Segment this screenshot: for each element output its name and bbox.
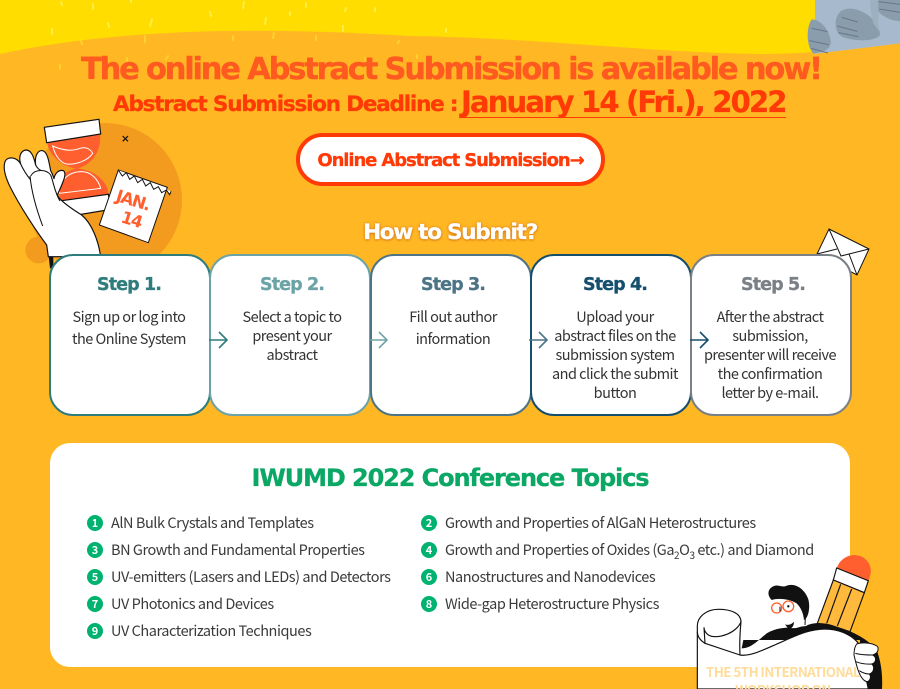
- step 4 text: button: [594, 382, 636, 403]
- step 4 text: Upload your: [576, 306, 654, 327]
- background: yellow header band: [0, 0, 815, 70]
- deadline date: January 14 (Fri.), 2022: [461, 85, 786, 119]
- step 4 text: submission system: [555, 344, 675, 365]
- panel: conference topics: 5: [92, 569, 98, 585]
- step 2 title: Step 2.: [260, 275, 324, 295]
- button: online abstract submission: [296, 133, 605, 186]
- illustration: hourglass, hand and calendar: 14: [119, 208, 145, 232]
- step 2 text: [242, 306, 342, 365]
- scroll text: THE 5TH INTERNATIONAL: [706, 661, 860, 681]
- step 1 title: Step 1.: [97, 275, 161, 295]
- topic 1: AlN Bulk Crystals and Templates: [111, 512, 314, 533]
- step 5 title: Step 5.: [741, 275, 805, 295]
- step 4 panel: [530, 254, 692, 416]
- panel: conference topics: [50, 443, 850, 667]
- step 5 text: [704, 306, 836, 403]
- illustration: hourglass, hand and calendar: JAN.: [113, 186, 152, 214]
- arrow: step 4 to 5: [690, 331, 709, 349]
- arrow: step 1 to 2: [209, 331, 228, 349]
- step 2 panel: [209, 254, 371, 416]
- topic 5: UV-emitters (Lasers and LEDs) and Detectors: [111, 566, 391, 587]
- heading: how to submit: How to Submit?: [363, 220, 537, 245]
- illustration: robot hands top right: [808, 0, 900, 54]
- step 1 text: Sign up or log into: [73, 306, 185, 327]
- step 5 panel: [690, 254, 852, 416]
- step 5 text: submission,: [732, 325, 808, 346]
- step 5 text: the confirmation: [718, 363, 822, 384]
- step 3 panel: [370, 254, 532, 416]
- step 3 text: Fill out author: [409, 306, 497, 327]
- panel: conference topics: 4: [426, 542, 432, 558]
- deadline label: Abstract Submission Deadline :: [113, 92, 457, 117]
- step 4 text: [552, 306, 678, 403]
- step 2 text: abstract: [266, 344, 318, 365]
- deadline line: [113, 85, 786, 119]
- topic 6: Nanostructures and Nanodevices: [445, 566, 655, 587]
- topics heading: IWUMD 2022 Conference Topics: [252, 464, 648, 492]
- topic 4: Growth and Properties of Oxides (Ga2O3 etc.) and Diamond: [445, 539, 814, 562]
- topic 2: Growth and Properties of AlGaN Heterostructures: [445, 512, 756, 533]
- step 1 text: the Online System: [72, 328, 186, 349]
- topic 8: Wide-gap Heterostructure Physics: [445, 593, 659, 614]
- step 5 text: presenter will receive: [704, 344, 836, 365]
- step 4 text: abstract files on the: [554, 325, 676, 346]
- step 5 text: letter by e-mail.: [721, 382, 819, 403]
- panel: conference topics: 8: [426, 596, 432, 612]
- button: online abstract submission: Online Abstract Submission→: [317, 150, 584, 171]
- step 4 title: Step 4.: [583, 275, 647, 295]
- step 2 text: present your: [252, 325, 332, 346]
- step 3 text: information: [416, 328, 490, 349]
- topic 7: UV Photonics and Devices: [111, 593, 274, 614]
- illustration: hourglass, hand and calendar: [4, 118, 182, 268]
- step 4 text: and click the submit: [552, 363, 678, 384]
- panel: conference topics: 1: [92, 515, 98, 531]
- panel: conference topics: 9: [92, 623, 98, 639]
- arrow: step 3 to 4: [529, 331, 548, 349]
- icon: envelope: [816, 228, 870, 276]
- step 3 text: [409, 306, 498, 349]
- panel: conference topics: 2: [426, 515, 432, 531]
- title: The online Abstract Submission is available now!: [81, 52, 821, 87]
- panel: conference topics: 3: [92, 542, 98, 558]
- step 2 text: Select a topic to: [242, 306, 342, 327]
- step 1 text: [72, 306, 186, 349]
- step 3 title: Step 3.: [421, 275, 485, 295]
- arrow: step 2 to 3: [370, 331, 388, 349]
- topic 3: BN Growth and Fundamental Properties: [111, 539, 364, 560]
- panel: conference topics: 6: [426, 569, 432, 585]
- panel: conference topics: 7: [92, 596, 98, 612]
- step 1 panel: [49, 254, 211, 416]
- step 5 text: After the abstract: [717, 306, 823, 327]
- illustration: person with pencil and scroll: [696, 555, 882, 689]
- topic 9: UV Characterization Techniques: [111, 620, 311, 641]
